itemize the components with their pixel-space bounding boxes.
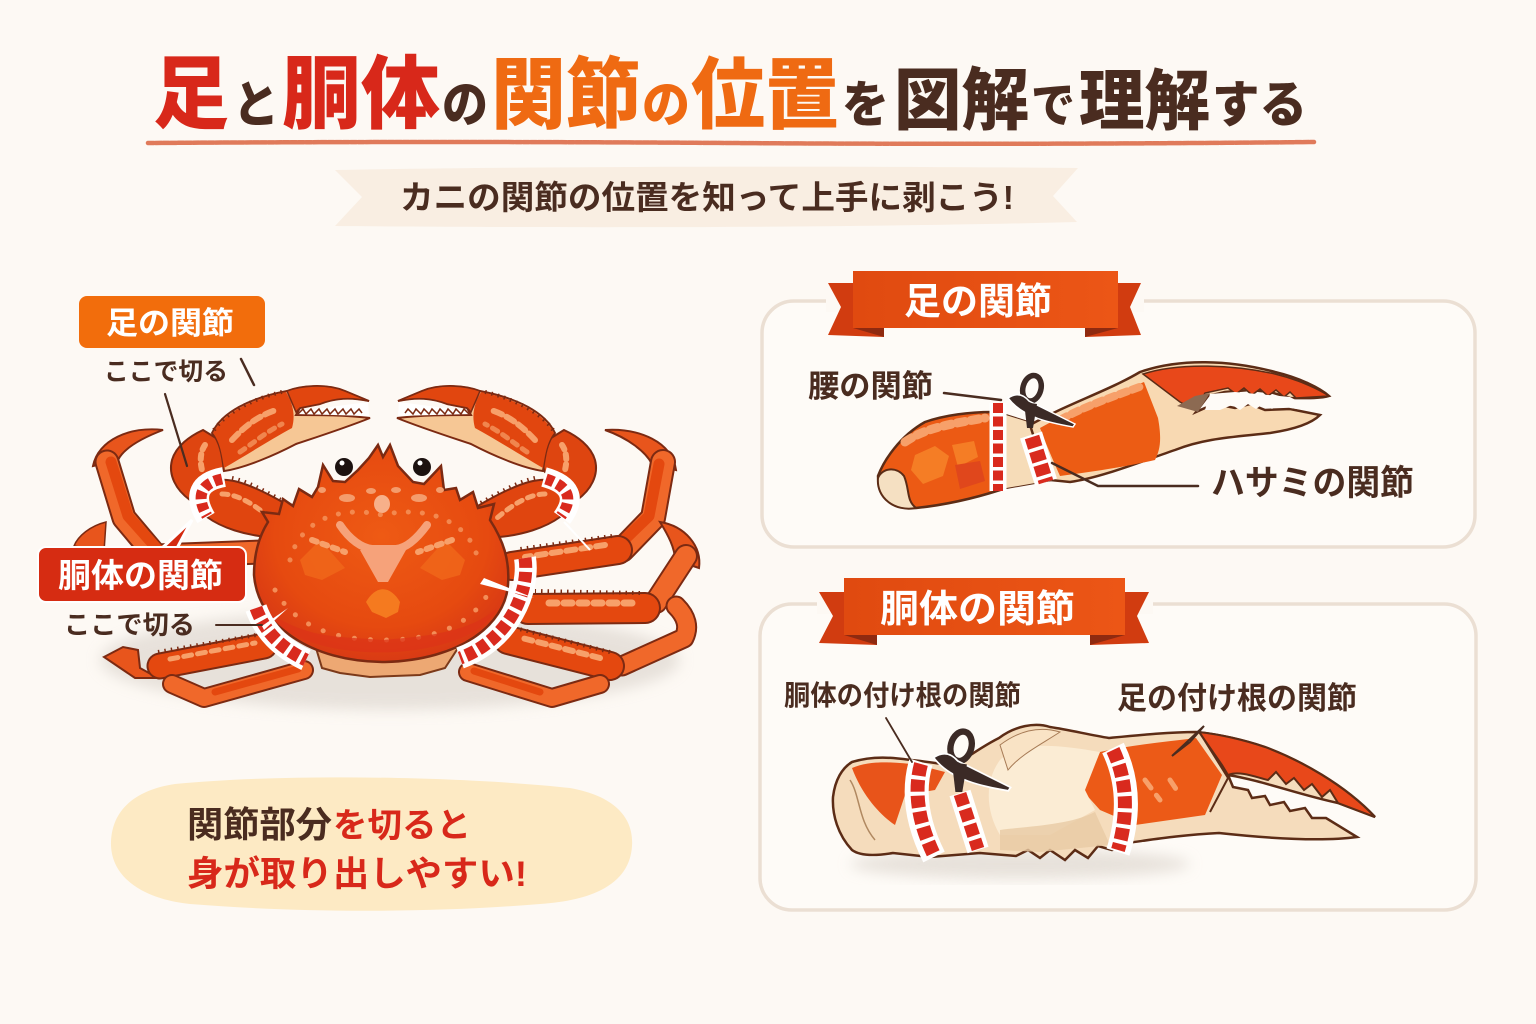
- label: leg joint tag: 足の関節: [106, 306, 234, 341]
- crab legs left: [74, 429, 304, 698]
- icon: scissors: [1008, 373, 1075, 428]
- title: 足: [153, 50, 229, 139]
- crab claws: [171, 386, 596, 537]
- title: [153, 50, 1307, 139]
- annotation: cut here top: [104, 358, 254, 466]
- subtitle banner: カニの関節の位置を知って上手に剥こう!: [400, 179, 1014, 216]
- crab eyes: [335, 458, 431, 476]
- label: leg base joint: [1117, 681, 1357, 756]
- shell markings: [268, 487, 497, 652]
- title: 胴体: [282, 50, 440, 139]
- crab illustration: [74, 386, 699, 710]
- cut marks: body: [917, 748, 1126, 857]
- crab shell: [254, 445, 508, 662]
- label: pincer joint: ハサミの関節: [1211, 464, 1414, 503]
- title: の: [442, 77, 488, 133]
- title: 図解: [894, 63, 1029, 139]
- panel: body joints: [760, 578, 1476, 910]
- callout: tip bubble: 関節部分: [187, 804, 332, 845]
- title: と: [233, 77, 279, 133]
- title: 関節: [491, 51, 641, 139]
- crab shadow: [100, 610, 680, 710]
- callout: tip bubble: 身が取り出しやすい!: [187, 855, 527, 894]
- shadow: body claw: [850, 849, 1190, 879]
- ribbon: body joints: 胴体の関節: [880, 589, 1075, 631]
- label: leg base joint: 足の付け根の関節: [1117, 681, 1357, 716]
- claw illustration: body: [833, 725, 1375, 860]
- label: waist joint: 腰の関節: [808, 369, 933, 404]
- label: body base joint: 胴体の付け根の関節: [784, 680, 1021, 711]
- callout: tip bubble: を切ると: [333, 807, 471, 845]
- ribbon: leg joints: 足の関節: [904, 281, 1052, 322]
- label: body joint tag: 胴体の関節: [58, 557, 223, 594]
- title: する: [1212, 77, 1307, 133]
- label: waist joint: [808, 369, 1001, 404]
- icon: scissors body: [934, 729, 1011, 792]
- fourth left leg: [172, 670, 304, 698]
- title: の: [642, 77, 690, 133]
- label: leg joint tag: [79, 296, 265, 348]
- claw illustration: leg: [878, 362, 1329, 509]
- ribbon: body joints: [819, 578, 1149, 645]
- title: で: [1031, 80, 1075, 133]
- subtitle banner: [335, 167, 1078, 227]
- ribbon: leg joints: [828, 271, 1141, 337]
- annotation: cut here lower: ここで切る: [64, 610, 195, 640]
- cut marks: leg: [998, 403, 1046, 491]
- crab abdomen: [316, 648, 458, 677]
- title: 位置: [691, 51, 839, 139]
- label: body base joint: [784, 680, 1021, 762]
- cut marks crab: [199, 477, 590, 660]
- panel: leg joints: [762, 271, 1475, 547]
- title: 理解: [1079, 64, 1210, 138]
- third left leg: [104, 647, 158, 678]
- callout: tip bubble: [111, 777, 632, 911]
- title underline: [148, 142, 1314, 144]
- label: body joint tag: [38, 520, 246, 602]
- annotation: cut here top: ここで切る: [104, 358, 228, 386]
- title: を: [842, 77, 889, 133]
- label: pincer joint: [1052, 463, 1414, 503]
- crab legs right: [468, 430, 699, 698]
